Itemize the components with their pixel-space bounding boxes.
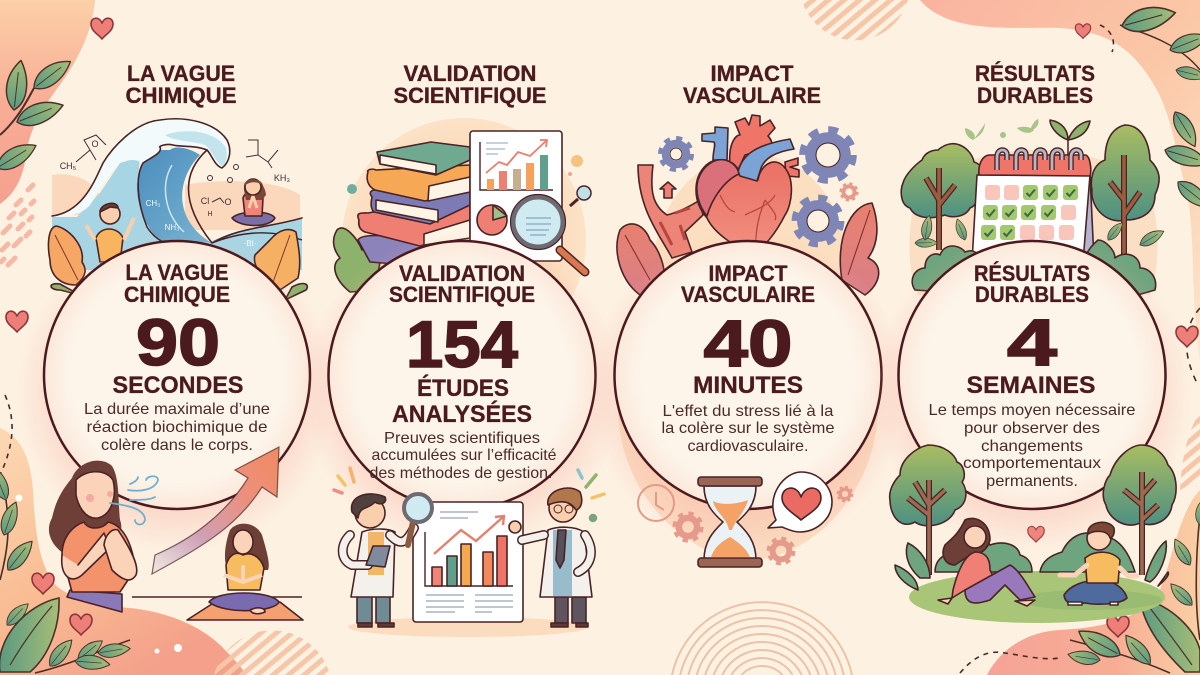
chart board <box>413 502 523 622</box>
description: comportementaux <box>963 455 1101 472</box>
icon: clock <box>638 485 674 521</box>
circle heading <box>124 260 230 307</box>
chemical formulas <box>60 135 290 218</box>
right tree <box>1103 445 1176 575</box>
foliage: top right leaves <box>1119 1 1200 213</box>
circle heading: LA VAGUE <box>126 260 228 285</box>
left tree <box>901 144 983 250</box>
description: Preuves scientifiques <box>384 430 540 447</box>
circle heading: DURABLES <box>975 282 1089 307</box>
illustration: chemical wave: CH₃ <box>146 199 160 208</box>
stat circle <box>302 232 622 552</box>
chemical formulas: KH₃ <box>274 173 290 183</box>
panel: résultats durables <box>872 61 1192 623</box>
right tree <box>1091 125 1159 265</box>
heart <box>696 115 799 254</box>
big number: 154 <box>406 307 518 381</box>
chemical formulas: CH₅ <box>60 161 77 171</box>
heading <box>394 61 546 108</box>
heading <box>975 61 1095 108</box>
unit: SECONDES <box>112 372 244 399</box>
icon: heart speech bubble <box>768 472 832 532</box>
heading: IMPACT <box>710 61 794 86</box>
artery <box>638 165 703 258</box>
unit: MINUTES <box>693 372 803 399</box>
stat circle <box>17 232 337 552</box>
stat circle <box>588 232 908 552</box>
illustration: calendar and trees <box>901 119 1166 300</box>
circle heading: SCIENTIFIQUE <box>389 282 535 307</box>
left tree <box>890 445 966 575</box>
magnifier <box>510 186 591 272</box>
bushes <box>912 214 1166 300</box>
plants at wave base <box>48 226 307 300</box>
illustration: scientists and chart board <box>334 468 604 637</box>
description <box>662 403 835 455</box>
circle heading: IMPACT <box>708 261 788 286</box>
illustration: couple relaxing in park <box>890 445 1176 623</box>
circle heading <box>974 261 1090 307</box>
heading: SCIENTIFIQUE <box>394 83 546 108</box>
description: pour observer des <box>964 420 1100 437</box>
circle heading <box>681 261 815 307</box>
unit: ÉTUDES <box>417 374 509 402</box>
description: Le temps moyen nécessaire <box>928 402 1136 419</box>
book stack <box>358 142 470 270</box>
illustration: chemical wave <box>48 119 307 300</box>
circle heading <box>389 261 535 307</box>
icon: hourglass <box>698 477 762 567</box>
description: cardiovasculaire. <box>688 438 808 455</box>
unit <box>392 374 532 428</box>
description: accumulées sur l’efficacité <box>372 447 557 464</box>
gears <box>662 132 851 242</box>
breath swirls <box>110 476 158 525</box>
description: des méthodes de gestion. <box>370 465 552 482</box>
bushes behind <box>935 538 1032 572</box>
illustration: chemical wave: NH₃ <box>165 223 179 232</box>
green leaf <box>334 228 380 292</box>
circle heading: VASCULAIRE <box>681 282 815 307</box>
panel: la vague chimique <box>17 61 337 620</box>
foliage: bottom left leaves <box>0 465 131 673</box>
circle heading: CHIMIQUE <box>124 282 230 307</box>
person in wave <box>86 203 134 272</box>
icon: small gears <box>676 487 852 562</box>
panel: impact vasculaire <box>588 61 908 567</box>
chemical formulas: O <box>224 197 232 207</box>
description: changements <box>981 438 1083 455</box>
heading: DURABLES <box>977 83 1093 108</box>
illustration: heart and gears <box>617 115 879 295</box>
report page with chart <box>470 131 562 261</box>
big number: 4 <box>1007 305 1057 379</box>
panel: validation scientifique <box>302 61 622 637</box>
stat circle <box>872 232 1192 552</box>
lower peach crescent <box>618 410 878 560</box>
big number: 40 <box>704 306 792 380</box>
chemical formulas: O <box>91 139 99 149</box>
description <box>928 402 1136 490</box>
description: colère dans le corps. <box>101 437 253 454</box>
heading: VALIDATION <box>404 61 536 86</box>
woman sitting <box>938 518 1035 606</box>
meditating woman on wave <box>232 179 275 226</box>
unit: ANALYSÉES <box>392 400 532 428</box>
unit: SEMAINES <box>966 372 1096 399</box>
man meditating <box>1060 522 1137 605</box>
foliage: bottom right leaves <box>1067 500 1200 673</box>
chemical formulas: H <box>207 211 213 218</box>
illustration: chemical wave: ·Bt· <box>244 239 256 248</box>
circle heading: VALIDATION <box>399 261 525 286</box>
circle heading: RÉSULTATS <box>974 261 1090 286</box>
scientist right <box>509 488 592 627</box>
description: permanents. <box>986 473 1078 490</box>
description: la colère sur le système <box>662 420 835 437</box>
illustration: yoga woman <box>132 524 303 620</box>
heading: LA VAGUE <box>127 61 235 86</box>
heading: RÉSULTATS <box>975 61 1095 86</box>
chemical formulas: Cl <box>201 196 209 206</box>
illustration: breathing woman <box>49 461 158 612</box>
scientist left <box>343 494 432 627</box>
calendar <box>972 150 1094 262</box>
sprout <box>1050 120 1090 155</box>
description: L'effet du stress lié à la <box>662 403 834 420</box>
heading <box>126 61 236 108</box>
ground leaves <box>895 541 1168 590</box>
illustration: books and report <box>334 118 591 362</box>
description: réaction biochimique de <box>86 419 268 436</box>
heading <box>683 61 821 108</box>
heading: VASCULAIRE <box>683 83 821 108</box>
description <box>84 401 270 454</box>
description <box>370 430 557 482</box>
foliage: top left branch <box>0 54 75 175</box>
heading: CHIMIQUE <box>126 83 236 108</box>
arrow rising <box>152 447 279 574</box>
big number: 90 <box>136 305 220 379</box>
description: La durée maximale d’une <box>84 401 270 418</box>
